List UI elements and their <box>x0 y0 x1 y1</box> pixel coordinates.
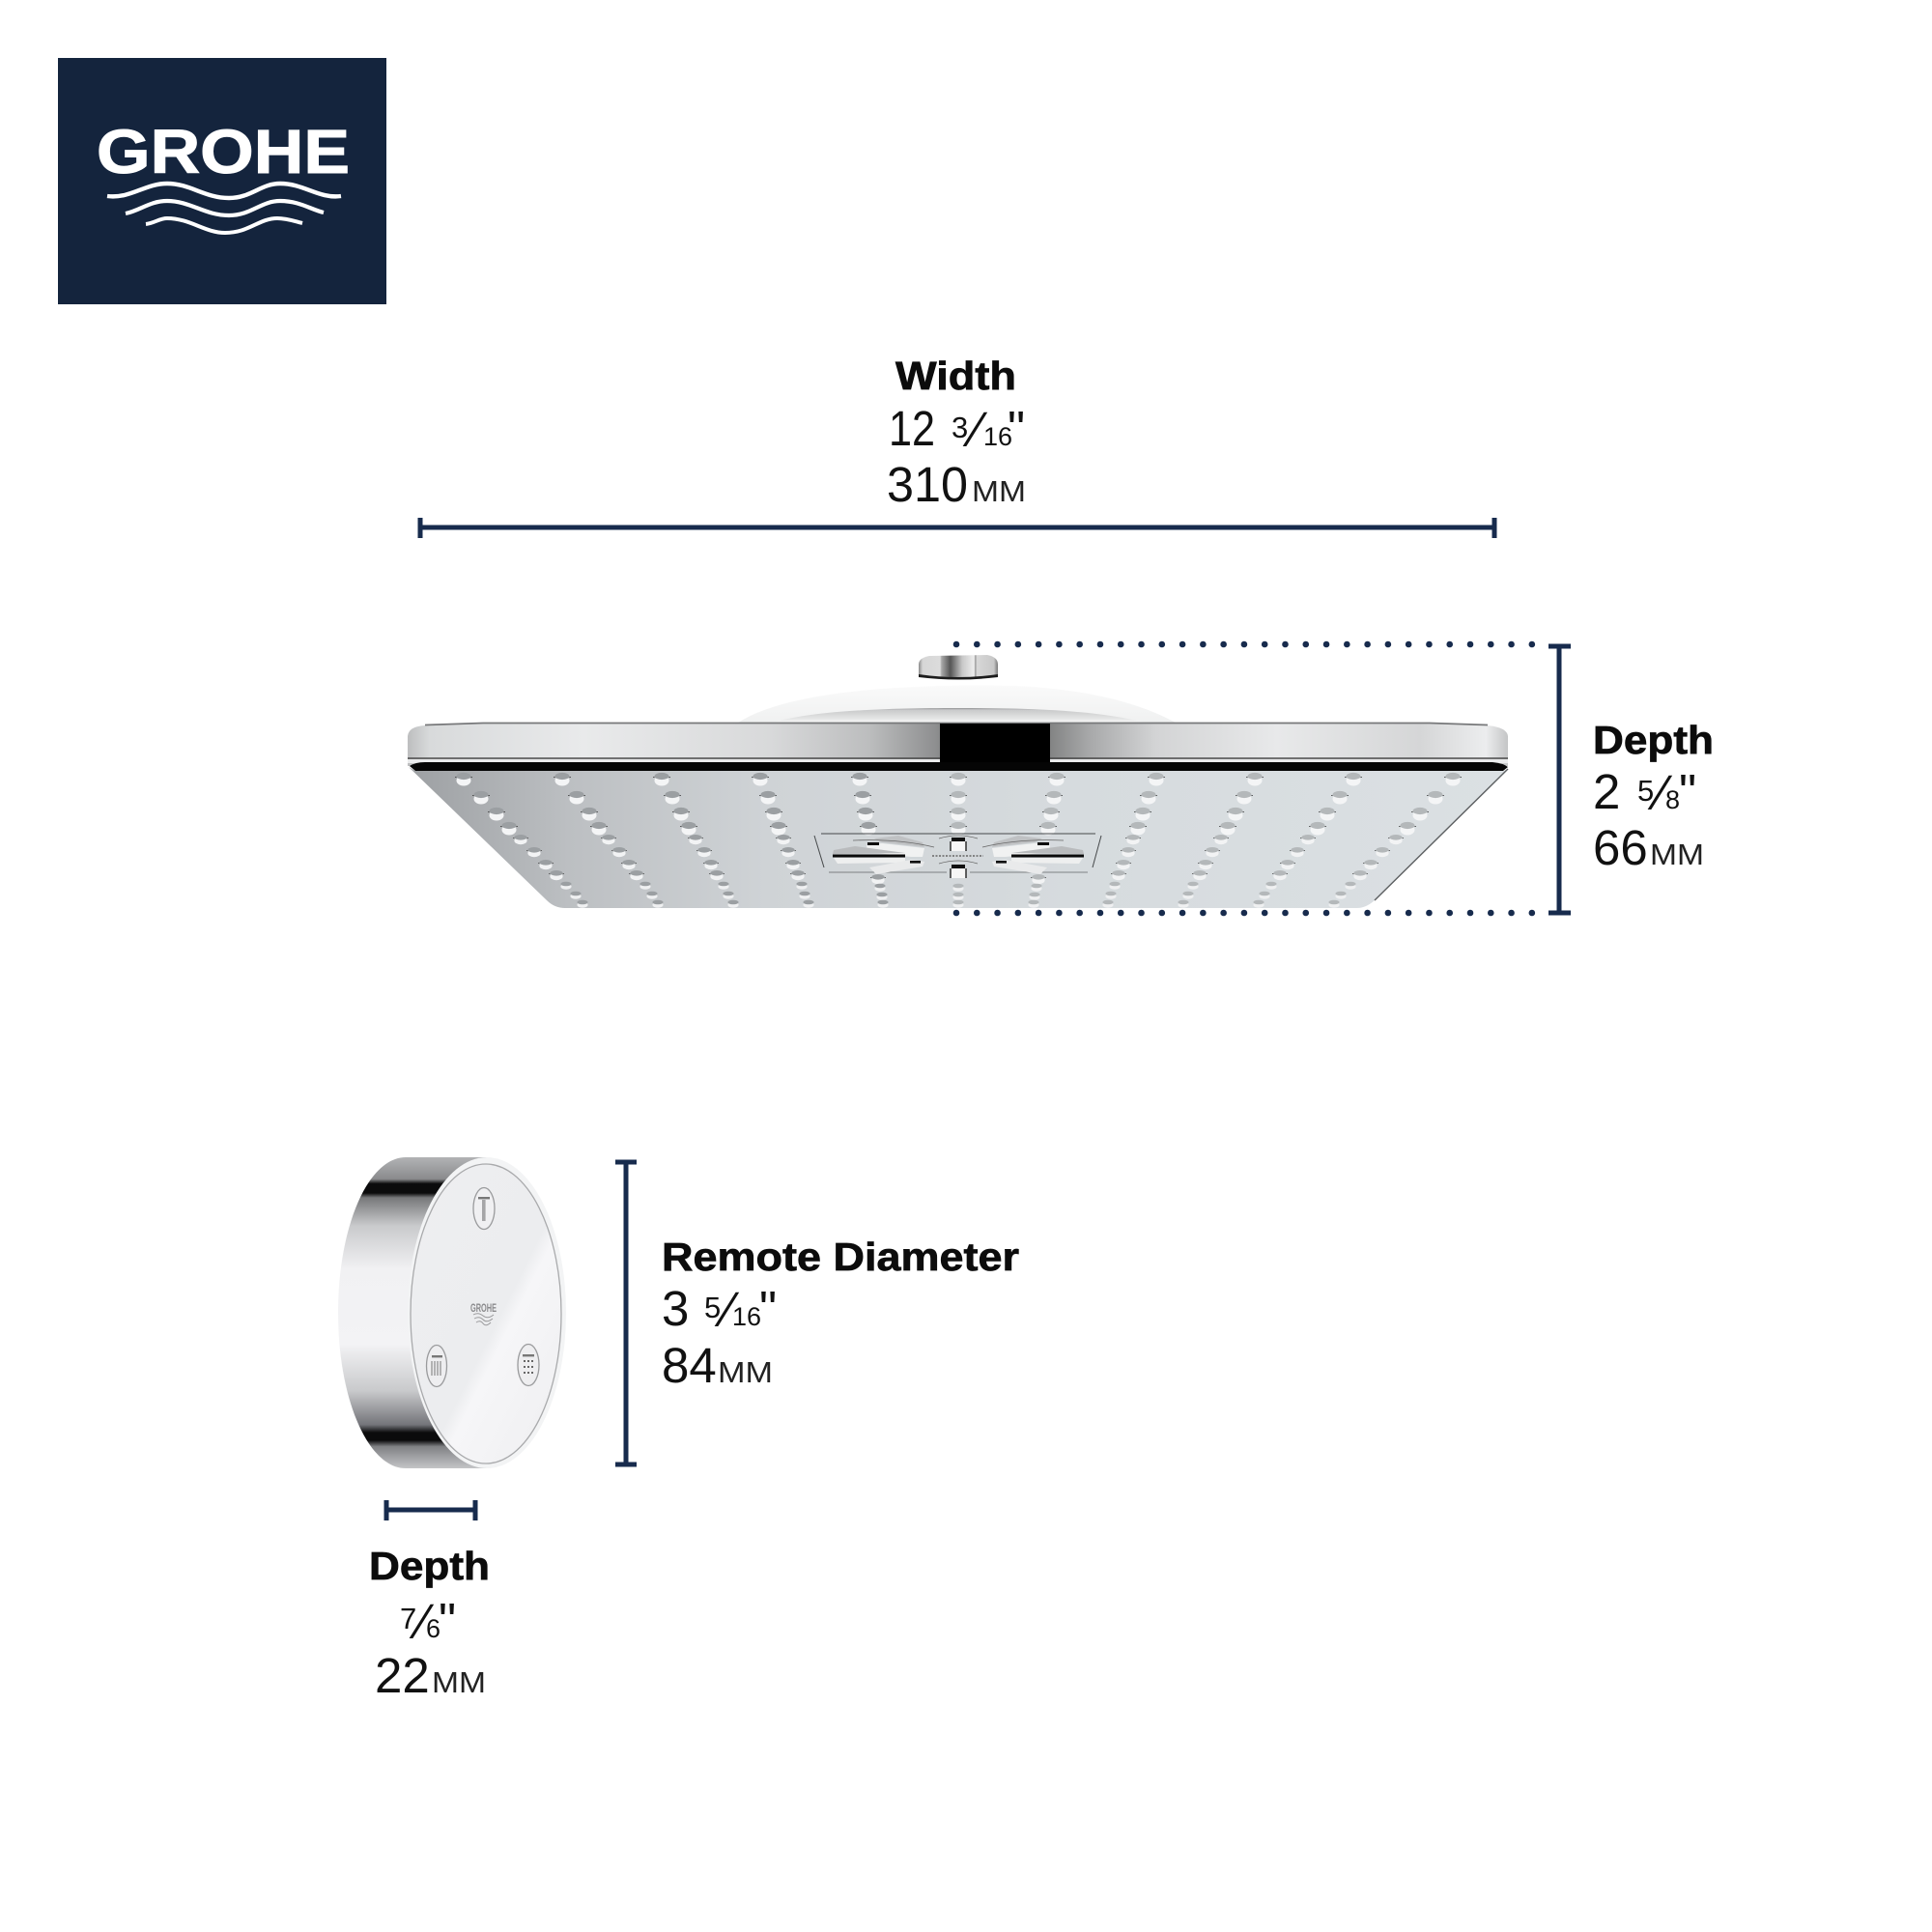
width label: MM <box>972 474 1026 508</box>
width label: ⁄ <box>962 402 988 457</box>
dotted guide top <box>956 641 1532 647</box>
shower depth label: 8 <box>1665 785 1680 814</box>
shower depth label: ⁄ <box>1647 765 1673 820</box>
remote control <box>338 1157 566 1468</box>
shower head <box>408 655 1508 908</box>
remote depth label: 7 <box>400 1602 416 1635</box>
remote diameter label <box>662 1235 1019 1393</box>
dotted guide bottom <box>956 910 1532 916</box>
nozzles <box>455 773 1462 908</box>
width label: 310 <box>887 457 968 512</box>
shower depth label: 2 <box>1593 764 1620 819</box>
remote diameter label: 3 <box>662 1281 689 1336</box>
remote diameter label: 84 <box>662 1338 717 1393</box>
left button <box>427 1345 446 1387</box>
glass face <box>411 1164 561 1463</box>
hub frame <box>814 834 1101 872</box>
black shadow strip <box>410 762 1508 771</box>
remote diameter label: 16 <box>732 1302 761 1331</box>
remote depth label: Depth <box>369 1544 490 1588</box>
remote logo <box>470 1301 497 1325</box>
remote depth dimension line <box>386 1500 475 1520</box>
remote diameter label: MM <box>718 1355 773 1389</box>
mounting nut <box>919 655 998 680</box>
remote diameter label: Remote Diameter <box>662 1235 1019 1279</box>
right blades <box>982 836 1084 874</box>
width label: 3 <box>952 411 968 444</box>
remote depth label: ⁄ <box>409 1594 435 1649</box>
remote depth label: 6 <box>426 1614 440 1643</box>
remote diameter label: 5 <box>704 1291 721 1324</box>
white rim <box>408 1157 566 1468</box>
width label: Width <box>895 354 1016 398</box>
remote depth label: MM <box>432 1665 486 1699</box>
width label: 16 <box>983 422 1012 451</box>
width label: " <box>1008 401 1025 456</box>
spray plate <box>409 767 1508 908</box>
chrome body <box>338 1157 487 1468</box>
left blades <box>833 836 934 874</box>
central spray hub <box>814 834 1101 878</box>
remote depth label <box>369 1544 490 1703</box>
right button <box>518 1345 539 1385</box>
remote depth label: 22 <box>375 1648 430 1703</box>
shower depth label: 66 <box>1593 820 1648 875</box>
dome mount <box>738 685 1176 723</box>
shower depth label <box>1593 718 1714 875</box>
chrome band <box>408 723 1508 766</box>
top button <box>473 1188 495 1229</box>
shower depth label: MM <box>1650 838 1704 871</box>
remote depth label: " <box>439 1593 456 1648</box>
remote diameter label: " <box>759 1281 777 1336</box>
width label: 12 <box>889 401 935 456</box>
remote logo: GROHE <box>470 1301 497 1315</box>
GROHE logo <box>58 58 386 304</box>
center jets <box>951 838 966 878</box>
shower depth label: 5 <box>1637 774 1654 808</box>
black reflection block <box>940 724 1050 772</box>
infographic canvas <box>58 58 1712 1692</box>
GROHE logo: GROHE <box>97 117 350 186</box>
shower depth label: " <box>1679 764 1696 819</box>
height dimension line <box>1548 646 1571 913</box>
remote diameter dimension line <box>615 1162 637 1464</box>
width label <box>887 354 1026 512</box>
width dimension line <box>419 518 1496 538</box>
shower depth label: Depth <box>1593 718 1714 762</box>
remote diameter label: ⁄ <box>714 1282 740 1337</box>
